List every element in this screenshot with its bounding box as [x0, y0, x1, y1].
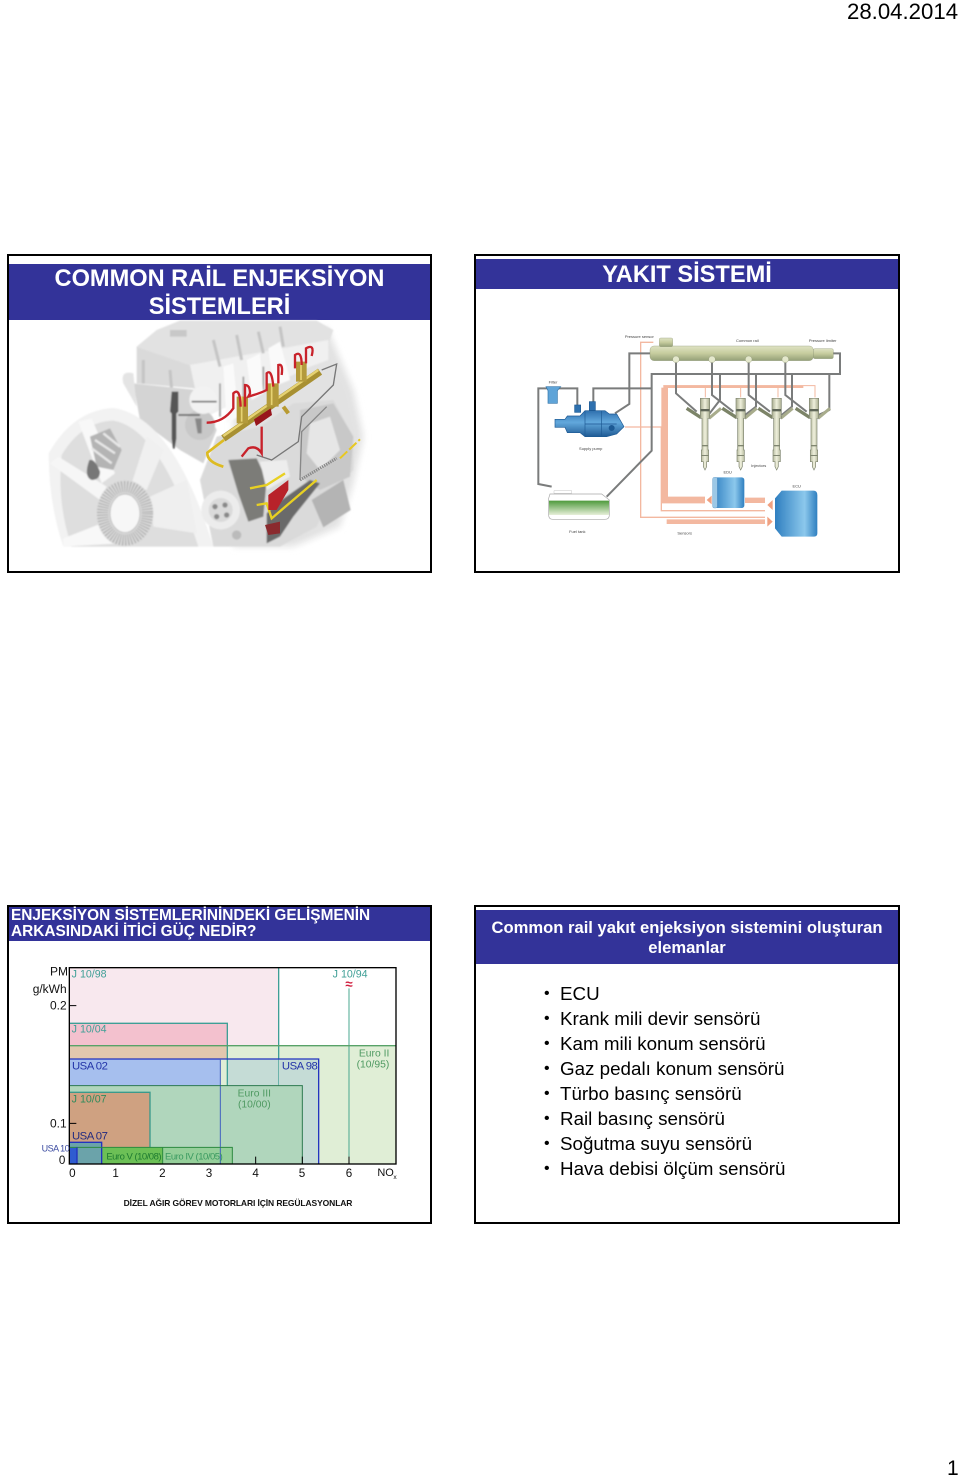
filter	[546, 387, 561, 403]
region labels: J 10/94	[333, 968, 368, 980]
axis labels: 4	[252, 1167, 259, 1180]
panel: common rail slide	[7, 254, 432, 573]
oil filter	[312, 480, 351, 527]
axis labels: 1	[112, 1167, 119, 1180]
brass injector fittings	[237, 362, 307, 423]
engine soft shadow	[233, 327, 363, 547]
diagram labels: Injectors	[751, 463, 766, 468]
heading: driving force	[9, 907, 430, 941]
component list: Kam mili konum sensörü	[560, 1033, 766, 1054]
region labels: USA 98	[282, 1060, 318, 1072]
axis labels: 3	[206, 1167, 212, 1180]
fan hub	[97, 480, 153, 547]
component list	[544, 983, 786, 1179]
region labels: Euro IV (10/05)	[165, 1151, 223, 1162]
diagram labels: ECU	[792, 483, 801, 488]
region labels: (10/95)	[357, 1059, 389, 1070]
fuel tank	[549, 494, 609, 519]
region labels: J 10/98	[72, 968, 107, 980]
diagram labels: Fuel tank	[569, 529, 586, 534]
heading: common rail systems: SİSTEMLERİ	[149, 294, 290, 320]
heading: components	[476, 910, 898, 964]
fan ring	[49, 408, 213, 547]
diagram labels: Supply pump	[579, 446, 603, 451]
page number: 1	[947, 1457, 959, 1480]
diagram labels	[549, 334, 837, 535]
regulation outlines	[69, 968, 396, 1164]
cylinder head side	[133, 383, 217, 463]
axis labels: 0	[59, 1154, 66, 1167]
engine illustration	[49, 321, 363, 547]
component list: Gaz pedalı konum sensörü	[560, 1058, 784, 1079]
heading: common rail systems: COMMON RAİL ENJEKSİYON	[55, 266, 384, 292]
heading: driving force: ARKASINDAKİ İTİCİ GÜÇ NEDİR?	[11, 923, 256, 940]
red control parts	[268, 480, 288, 510]
diagram labels: Pressure sensor	[625, 334, 655, 339]
heading: components: elemanlar	[648, 938, 726, 957]
EDU	[713, 477, 744, 508]
diagram labels: EDU	[723, 470, 732, 475]
component list: Soğutma suyu sensörü	[560, 1133, 752, 1154]
region labels: ≈	[345, 976, 353, 991]
heading: fuel system: YAKIT SİSTEMİ	[602, 262, 772, 288]
component list: Hava debisi ölçüm sensörü	[560, 1158, 786, 1179]
region labels: J 10/07	[72, 1094, 107, 1106]
engine block	[200, 400, 353, 547]
alternator	[90, 428, 122, 470]
gray pipe	[257, 364, 337, 460]
region labels	[42, 968, 389, 1162]
panel: emission regulations slide	[7, 905, 432, 1224]
heading: fuel system	[476, 259, 898, 289]
diagram labels: Filter	[549, 379, 558, 384]
axis labels: 6	[346, 1167, 352, 1180]
diagram labels: Sensors	[677, 530, 692, 535]
red injector lines	[207, 347, 313, 423]
region labels: Euro II	[359, 1048, 389, 1059]
common rail	[650, 346, 813, 361]
valve cover top	[137, 321, 333, 365]
region labels: USA 10	[42, 1144, 70, 1154]
axis labels: 0.2	[50, 999, 67, 1013]
regulation areas	[69, 968, 396, 1164]
gray fuel lines	[538, 353, 840, 497]
component list: Rail basınç sensörü	[560, 1108, 725, 1129]
region labels: J 10/04	[72, 1024, 107, 1036]
fuel pump body	[228, 458, 267, 522]
fan spokes	[78, 418, 115, 483]
yellow pipes	[207, 440, 224, 467]
axis labels: 0	[69, 1167, 76, 1180]
region labels: USA 07	[72, 1130, 108, 1142]
panel: components slide	[474, 905, 900, 1224]
orange arrows	[707, 496, 773, 527]
injectors	[687, 398, 721, 470]
emission regulation chart	[33, 965, 397, 1208]
component list: ECU	[560, 983, 600, 1004]
supply pump	[555, 402, 624, 437]
region labels: (10/00)	[238, 1100, 271, 1111]
component list: Türbo basınç sensörü	[560, 1083, 742, 1104]
axis labels: g/kWh	[33, 982, 67, 996]
axis labels: NO	[377, 1167, 394, 1179]
axis labels: PM	[50, 965, 68, 979]
axis labels: x	[393, 1174, 397, 1181]
orange signal lines	[625, 342, 815, 522]
injector body	[170, 392, 178, 449]
common rail	[223, 372, 320, 438]
cover side ribs	[190, 340, 328, 417]
heading: common rail systems	[9, 264, 430, 320]
panel: fuel system slide	[474, 254, 900, 573]
fuel system diagram	[538, 334, 840, 537]
BOSCH plate	[254, 408, 272, 426]
region labels: Euro III	[238, 1088, 271, 1099]
region labels: Euro V (10/08)	[106, 1151, 161, 1162]
axis labels	[33, 965, 397, 1181]
axis labels: 5	[299, 1167, 305, 1180]
axis labels: 0.1	[50, 1116, 67, 1130]
heading: components: Common rail yakıt enjeksiyon sistemini oluşturan	[492, 918, 882, 937]
pulley	[201, 491, 240, 529]
heading: driving force: ENJEKSİYON SİSTEMLERİNİNDEKİ GELİŞMENİN	[11, 907, 370, 924]
ECU	[775, 491, 817, 537]
region labels: USA 02	[72, 1060, 108, 1072]
chart caption: DİZEL AĞIR GÖREV MOTORLARI İÇİN REGÜLASYONLAR	[124, 1197, 352, 1208]
axis labels: 2	[159, 1167, 166, 1180]
component list: Krank mili devir sensörü	[560, 1008, 760, 1029]
diagram labels: Pressure limiter	[809, 338, 837, 343]
diagram labels: Common rail	[736, 338, 759, 343]
